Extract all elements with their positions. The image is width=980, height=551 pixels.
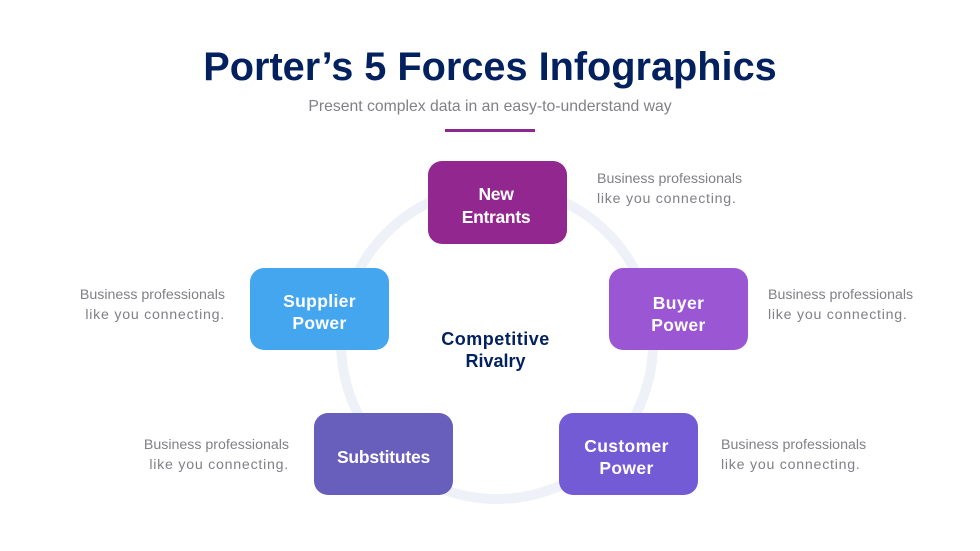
box: customer power: Customer xyxy=(584,436,669,456)
text: supplier power description: like you connecting. xyxy=(85,306,225,322)
text: supplier power description xyxy=(80,287,225,322)
box: buyer power: Buyer xyxy=(653,293,704,313)
text: buyer power description: Business professionals xyxy=(768,287,913,303)
box: customer power: Power xyxy=(599,458,654,478)
box: new entrants: New xyxy=(478,184,514,204)
text: customer power description xyxy=(721,437,866,472)
box: new entrants xyxy=(428,161,567,244)
center label: Competitive xyxy=(441,328,550,348)
center label xyxy=(441,328,550,371)
box: buyer power: Power xyxy=(651,315,706,335)
text: new entrants description: Business professionals xyxy=(597,171,742,187)
text: customer power description: like you connecting. xyxy=(721,456,861,472)
title underline xyxy=(445,129,535,132)
text: substitutes description: like you connecting. xyxy=(149,456,289,472)
box: supplier power: Supplier xyxy=(283,291,356,311)
box: customer power xyxy=(559,413,698,495)
box: new entrants: Entrants xyxy=(462,206,530,226)
text: substitutes description xyxy=(144,437,289,472)
box: substitutes xyxy=(314,413,453,495)
text: buyer power description: like you connecting. xyxy=(768,306,908,322)
box: supplier power xyxy=(250,268,389,350)
box: supplier power: Power xyxy=(292,313,347,333)
title: Porter’s 5 Forces Infographics xyxy=(203,44,777,88)
text: buyer power description xyxy=(768,287,913,322)
subtitle: Present complex data in an easy-to-understand way xyxy=(308,98,672,115)
box: substitutes: Substitutes xyxy=(337,447,430,467)
text: supplier power description: Business professionals xyxy=(80,287,225,303)
text: substitutes description: Business professionals xyxy=(144,437,289,453)
ring xyxy=(336,198,658,504)
center label: Rivalry xyxy=(465,351,526,371)
text: customer power description: Business professionals xyxy=(721,437,866,453)
text: new entrants description xyxy=(597,171,742,206)
box: buyer power xyxy=(609,268,748,350)
text: new entrants description: like you connecting. xyxy=(597,190,737,206)
